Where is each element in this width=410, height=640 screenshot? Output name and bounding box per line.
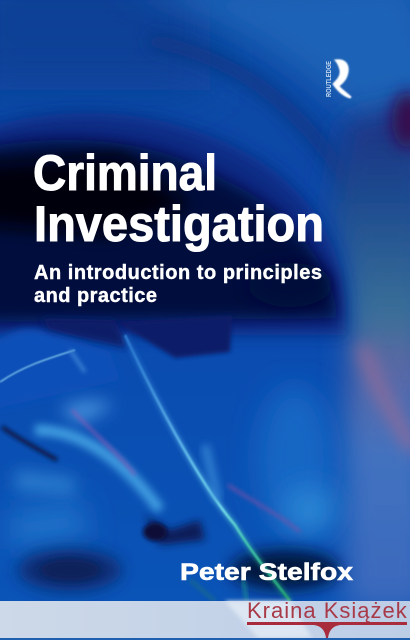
right column	[330, 100, 410, 610]
dark mass behind the title	[0, 113, 345, 335]
subtitle: An introduction to principles	[34, 262, 322, 284]
shop name: Kraina Książek	[247, 598, 408, 623]
bottom band	[0, 598, 410, 640]
title: Investigation	[34, 196, 324, 252]
title: Criminal	[33, 145, 217, 201]
logo wordmark: ROUTLEDGE	[324, 61, 333, 97]
logo letter R	[333, 60, 351, 98]
title	[33, 145, 324, 252]
subtitle	[34, 262, 322, 307]
blue lower left area	[0, 329, 120, 410]
dark smudges	[18, 549, 122, 591]
author: Peter Stelfox	[180, 559, 354, 586]
subtitle: and practice	[34, 285, 157, 307]
light streaks	[0, 350, 75, 382]
book rule	[247, 622, 407, 638]
lower glows	[257, 385, 333, 535]
icon: Routledge logo	[324, 60, 351, 98]
